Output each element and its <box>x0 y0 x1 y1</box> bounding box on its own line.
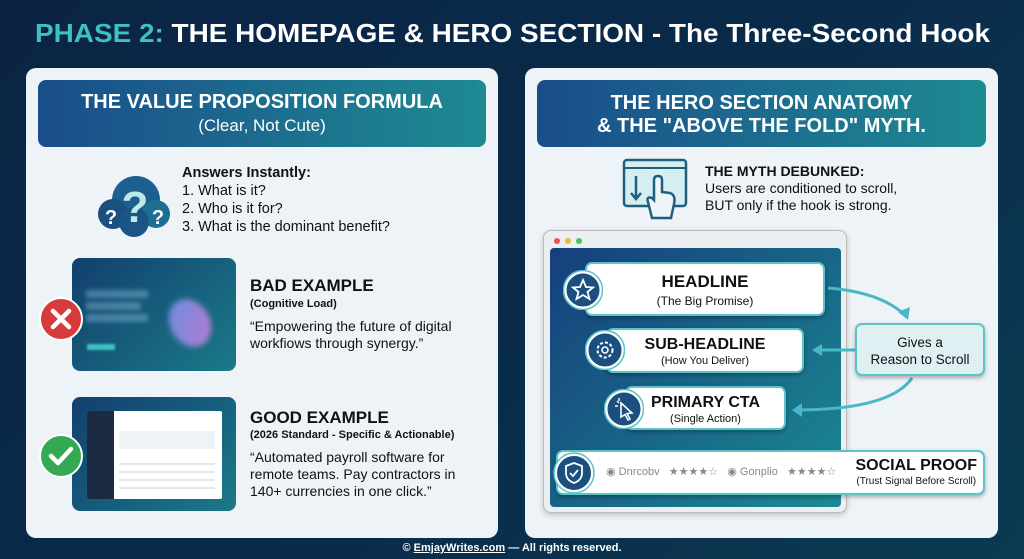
sub-headline box: SUB-HEADLINE <box>645 336 765 353</box>
right header <box>537 80 986 147</box>
text: good example: remote teams. Pay contractors in <box>250 466 455 482</box>
sub-headline box: (How You Deliver) <box>661 355 749 367</box>
text: good example <box>250 408 455 499</box>
social proof bar: SOCIAL PROOF <box>856 457 977 474</box>
headline box <box>585 262 825 316</box>
text: answers instantly: Answers Instantly: <box>182 165 311 181</box>
icon: cursor <box>604 389 644 429</box>
title: PHASE 2: THE HOMEPAGE & HERO SECTION - The Three-Second Hook <box>35 18 991 48</box>
text: good example: 140+ currencies in one click.” <box>250 483 432 499</box>
footer: © EmjayWrites.com — All rights reserved. <box>402 542 622 554</box>
callout: reason to scroll: Reason to Scroll <box>870 352 970 367</box>
text: answers instantly: 2. Who is it for? <box>182 201 283 217</box>
social proof bar <box>556 450 985 495</box>
primary cta box: PRIMARY CTA <box>651 394 760 411</box>
left header: THE VALUE PROPOSITION FORMULA <box>81 91 443 113</box>
panel: hero section anatomy <box>525 68 998 538</box>
text: answers instantly: 1. What is it? <box>182 183 266 199</box>
text: answers instantly: 3. What is the dominant benefit? <box>182 219 390 235</box>
primary cta box: (Single Action) <box>670 413 741 425</box>
icon: question cloud: ? <box>105 207 117 229</box>
right header: THE HERO SECTION ANATOMY <box>611 92 912 114</box>
text: good example: GOOD EXAMPLE <box>250 408 389 427</box>
headline box: (The Big Promise) <box>657 294 753 308</box>
callout: reason to scroll <box>855 323 985 376</box>
text: myth debunked <box>705 163 897 213</box>
icon: star <box>563 270 603 310</box>
social proof bar: ◉ Dnrcobv ★★★★☆ ◉ Gonplio ★★★★☆ <box>606 466 836 478</box>
sub-headline box <box>606 328 804 373</box>
text: myth debunked: THE MYTH DEBUNKED: <box>705 163 864 179</box>
text: myth debunked: Users are conditioned to scroll, <box>705 180 897 196</box>
headline box: HEADLINE <box>662 272 748 291</box>
good example mockup <box>72 397 236 511</box>
text: good example: (2026 Standard - Specific & Actionable) <box>250 429 454 441</box>
social proof bar: (Trust Signal Before Scroll) <box>856 476 976 487</box>
right header: & THE "ABOVE THE FOLD" MYTH. <box>597 115 926 137</box>
icon: question cloud: ? <box>122 183 148 232</box>
text: answers instantly <box>182 165 390 235</box>
icon: red x <box>39 297 83 341</box>
text: myth debunked: BUT only if the hook is strong. <box>705 197 892 213</box>
icon: gear <box>585 330 625 370</box>
text: bad example: (Cognitive Load) <box>250 298 337 310</box>
left header <box>38 80 486 147</box>
icon: question cloud: ? <box>152 207 164 229</box>
bad example mockup <box>72 258 236 371</box>
text: good example: “Automated payroll software for <box>250 449 445 465</box>
text: bad example: BAD EXAMPLE <box>250 276 374 295</box>
browser window <box>543 230 847 513</box>
text: bad example <box>250 276 452 351</box>
left header: (Clear, Not Cute) <box>198 116 326 135</box>
icon: scroll hand <box>622 158 688 220</box>
primary cta box <box>625 386 786 430</box>
panel: value proposition <box>26 68 498 538</box>
text: bad example: “Empowering the future of digital workfiows through synergy.” <box>250 318 452 351</box>
icon: question cloud <box>98 176 170 237</box>
icon: shield <box>553 452 595 493</box>
icon: green check <box>39 434 83 478</box>
callout: reason to scroll: Gives a <box>897 335 943 350</box>
